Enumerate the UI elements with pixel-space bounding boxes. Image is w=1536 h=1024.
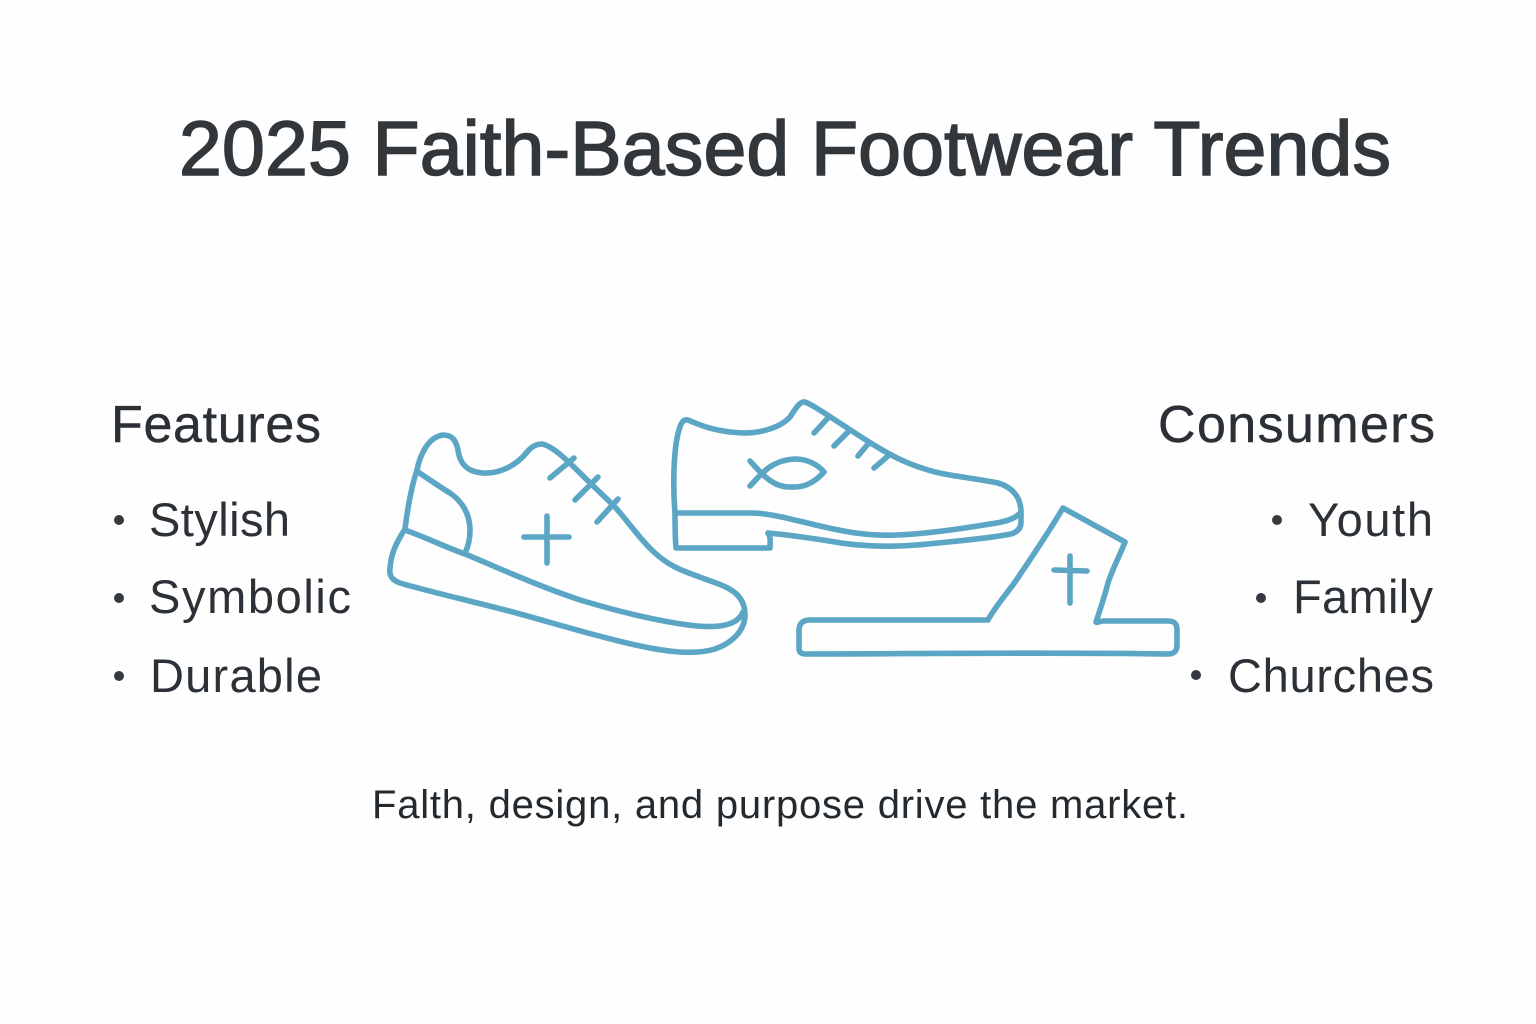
panel: consumers (1158, 396, 1435, 702)
list item: youth: Youth (1308, 493, 1433, 546)
panel: features (111, 396, 351, 702)
list item: durable: Durable (150, 649, 322, 702)
heading: consumers: Consumers (1158, 396, 1435, 454)
icon: slipper with cross (799, 508, 1177, 654)
icon: dress shoe with fish (674, 402, 1021, 548)
heading: features: Features (111, 396, 321, 454)
list item: family: Family (1293, 570, 1434, 623)
list item: stylish: Stylish (149, 493, 290, 546)
list item: symbolic: Symbolic (149, 570, 351, 623)
icon: sneaker with cross (390, 435, 745, 652)
caption: Falth, design, and purpose drive the market. (372, 783, 1188, 827)
title: 2025 Faith-Based Footwear Trends (179, 106, 1391, 192)
list item: churches: Churches (1228, 649, 1434, 702)
